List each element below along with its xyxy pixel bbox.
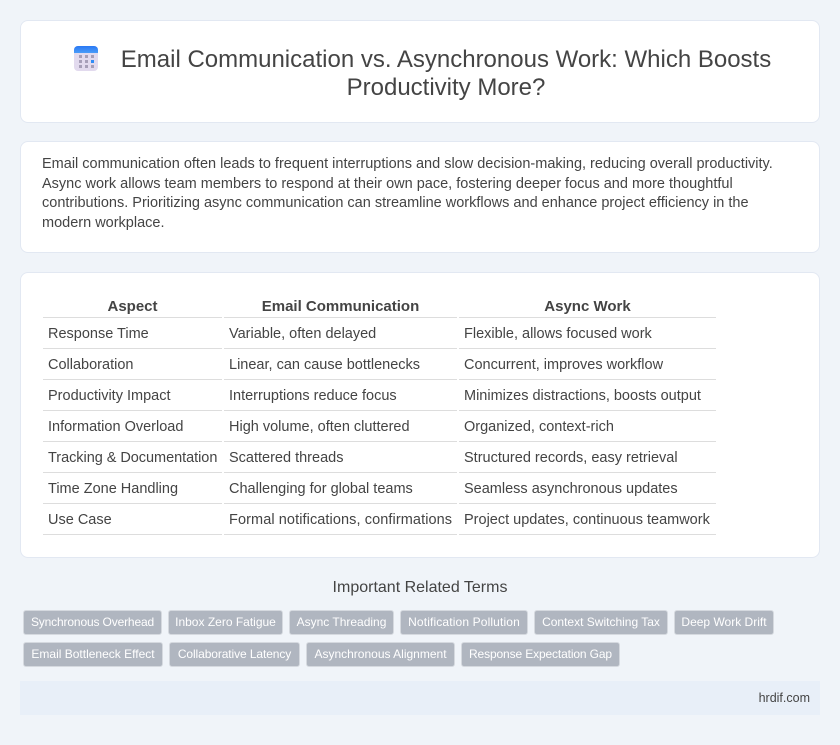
comparison table: Formal notifications, confirmations <box>229 512 452 528</box>
related term tags: Response Expectation Gap <box>469 647 612 661</box>
comparison table: Seamless asynchronous updates <box>464 481 678 497</box>
intro paragraph: Async work allows team members to respond at their own pace, fostering deeper focus and more thoughtful <box>42 176 733 192</box>
comparison table: Email Communication <box>262 298 419 315</box>
related term tags: Synchronous Overhead <box>31 615 154 629</box>
comparison table: Response Time <box>48 326 149 342</box>
comparison table: Collaboration <box>48 357 133 373</box>
comparison table: Organized, context-rich <box>464 419 614 435</box>
related term tags: Notification Pollution <box>408 615 520 629</box>
icon: calendar <box>74 46 98 71</box>
intro text panel <box>20 141 820 253</box>
comparison table: Structured records, easy retrieval <box>464 450 678 466</box>
related term tags <box>23 610 774 667</box>
related term tags: Collaborative Latency <box>178 647 291 661</box>
related term tags: Asynchronous Alignment <box>314 647 447 661</box>
related term tags: Inbox Zero Fatigue <box>175 615 276 629</box>
comparison table: Time Zone Handling <box>48 481 178 497</box>
comparison table: Linear, can cause bottlenecks <box>229 357 420 373</box>
comparison table: Use Case <box>48 512 112 528</box>
intro paragraph <box>42 156 773 230</box>
header panel <box>20 20 820 123</box>
comparison table: Information Overload <box>48 419 183 435</box>
comparison table: Aspect <box>107 298 158 315</box>
title <box>121 46 771 101</box>
title: Email Communication vs. Asynchronous Work: Which Boosts <box>121 46 771 73</box>
comparison table: Productivity Impact <box>48 388 170 404</box>
comparison table: Scattered threads <box>229 450 343 466</box>
related term tags: Deep Work Drift <box>681 615 767 629</box>
comparison table: Concurrent, improves workflow <box>464 357 663 373</box>
footer source: hrdif.com <box>759 691 810 705</box>
comparison table <box>43 298 716 535</box>
comparison table: Variable, often delayed <box>229 326 376 342</box>
comparison table: Flexible, allows focused work <box>464 326 652 342</box>
related term tags: Context Switching Tax <box>542 615 660 629</box>
intro paragraph: Email communication often leads to frequent interruptions and slow decision-making, reducing overall productivity. <box>42 156 773 172</box>
intro paragraph: contributions. Prioritizing async communication can streamline workflows and enhance project efficiency in the <box>42 195 749 211</box>
comparison table: Tracking & Documentation <box>48 450 217 466</box>
intro paragraph: modern workplace. <box>42 214 164 230</box>
comparison table: Minimizes distractions, boosts output <box>464 388 701 404</box>
comparison table: Challenging for global teams <box>229 481 413 497</box>
title: Productivity More? <box>347 74 545 101</box>
comparison table: Project updates, continuous teamwork <box>464 512 710 528</box>
related term tags: Email Bottleneck Effect <box>31 647 155 661</box>
comparison table: Interruptions reduce focus <box>229 388 397 404</box>
related term tags: Async Threading <box>297 615 386 629</box>
comparison table: Async Work <box>544 298 631 315</box>
comparison table: High volume, often cluttered <box>229 419 410 435</box>
footer bar <box>20 681 820 715</box>
related terms heading: Important Related Terms <box>333 579 507 596</box>
comparison table panel <box>20 272 820 558</box>
